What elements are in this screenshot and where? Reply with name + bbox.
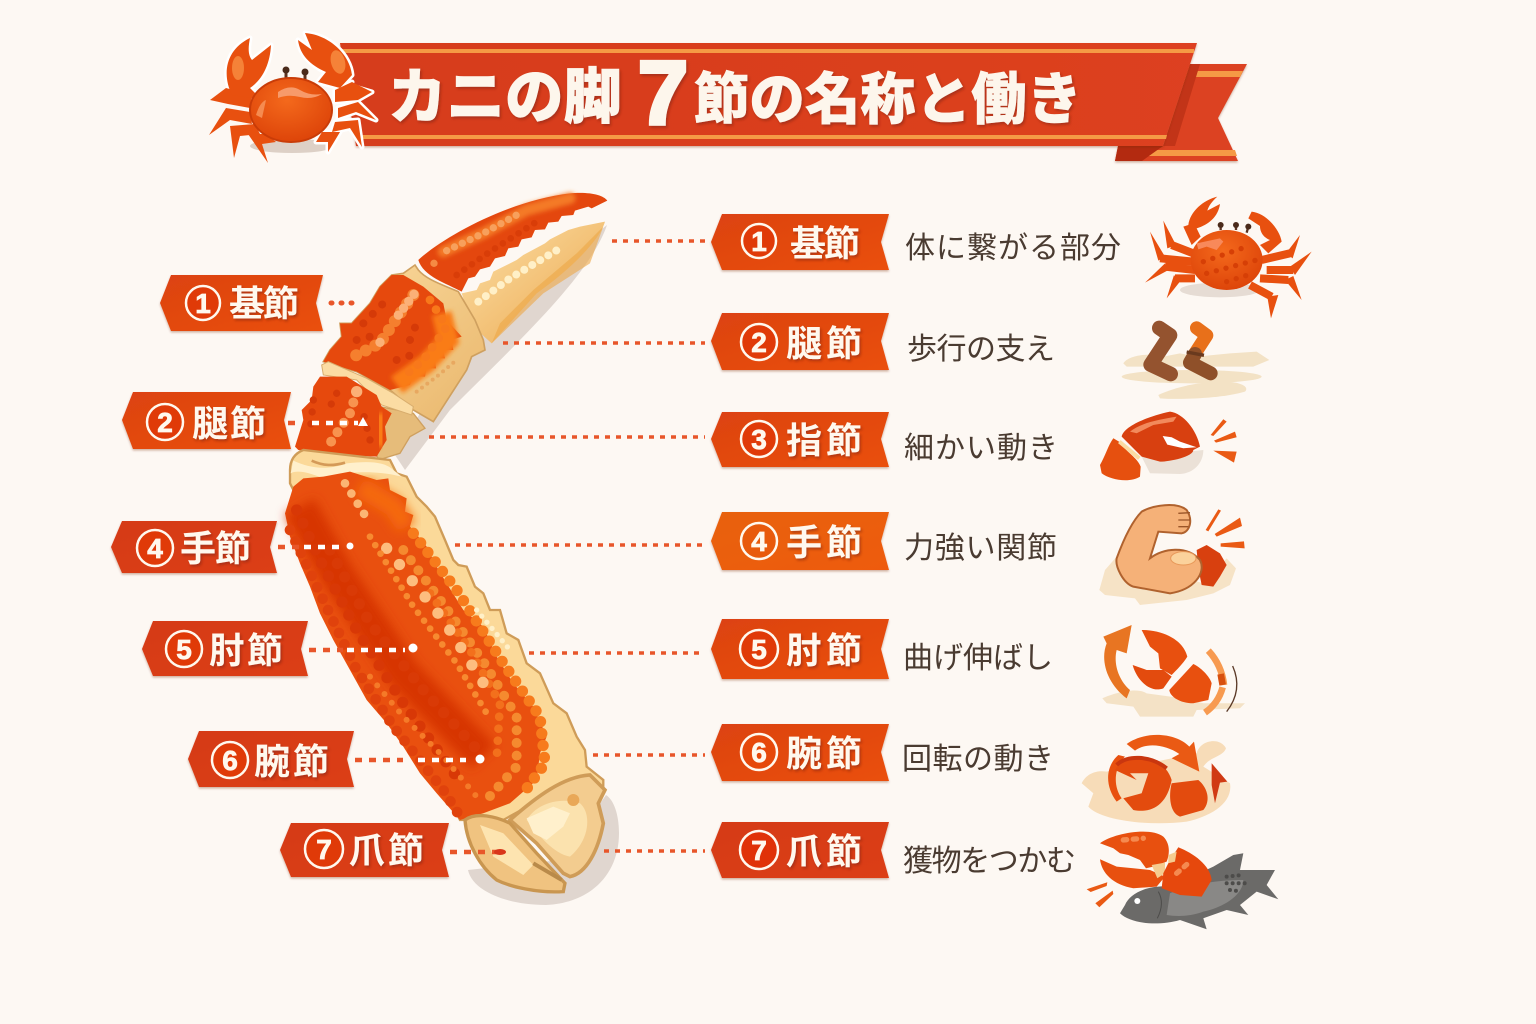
descriptions: 細かい動き [904,432,1058,465]
label: left 7: 7 [316,834,332,865]
icon: flexed arm [1099,505,1245,605]
label: left 1 [160,275,323,331]
title text: カニの脚 [388,64,622,131]
icon: small claw [1100,412,1237,480]
title text: 7 [638,44,688,144]
label: left 5 [142,621,308,676]
label: left 5: 肘節 [209,630,283,671]
label: left 1: 1 [195,288,211,319]
label: left 7 [280,823,449,877]
label: right 2 [711,313,889,370]
label: right 4: 手節 [786,522,862,563]
segment: long shell [285,450,603,820]
upper claw [418,193,607,292]
lower pincer [462,222,605,343]
label: right 6: 腕節 [786,733,862,774]
label: right 1 [711,214,889,270]
label: left 4: 4 [147,533,163,564]
icon: rotating claw [1082,735,1230,823]
label: right 6 [711,724,889,781]
title text: 節の名称と働き [694,68,1082,131]
label: right 5 [711,619,889,679]
leader end markers [346,417,506,855]
label: left 6 [188,731,354,787]
label: right 1: 1 [751,226,767,257]
label: right 3: 指節 [786,420,862,461]
label: right 5: 肘節 [786,630,862,671]
label: right 2: 2 [751,327,767,358]
label: right 7: 7 [751,835,767,866]
label: left 2 [122,392,291,449]
descriptions [902,232,1121,878]
descriptions: 回転の動き [902,743,1054,776]
icon: title crab [209,33,376,163]
label: left 5: 5 [176,634,192,665]
label: left 6: 6 [222,745,238,776]
label: right 5: 5 [751,634,767,665]
label: right 7 [711,822,889,878]
descriptions: 曲げ伸ばし [903,642,1053,675]
segment: upper shell [323,265,485,422]
label: right 4: 4 [751,526,767,557]
leader lines: left [278,303,498,852]
label: left 4: 手節 [180,528,251,569]
icon: claw and fish [1087,832,1278,929]
descriptions: 体に繋がる部分 [905,232,1121,265]
title text [388,44,1082,144]
label: left 4 [111,521,277,573]
label: right 7: 爪節 [786,831,862,872]
descriptions: 獲物をつかむ [903,845,1076,878]
label: right 4 [711,512,889,570]
icon: walking legs [1122,328,1269,399]
title banner [340,43,1247,161]
crab leg diagram [285,193,619,905]
label: right 2: 腿節 [786,323,862,364]
label: left 2: 2 [157,407,173,438]
icon: bending claw [1102,625,1245,717]
label: left 7: 爪節 [349,830,424,871]
descriptions: 力強い関節 [904,532,1057,565]
label: right 3: 3 [751,424,767,455]
leg shadow [395,225,619,905]
label: left 1: 基節 [229,283,299,324]
label: right 6: 6 [751,737,767,768]
label: right 1: 基節 [790,223,860,264]
descriptions: 歩行の支え [907,333,1055,366]
label: left 2: 腿節 [192,403,266,444]
icon: crab [1145,197,1312,318]
label: right 3 [711,412,889,467]
label: left 6: 腕節 [254,741,329,782]
segment: base joint [465,775,605,892]
leader lines: right [429,241,705,851]
segment: middle shell [295,362,425,460]
